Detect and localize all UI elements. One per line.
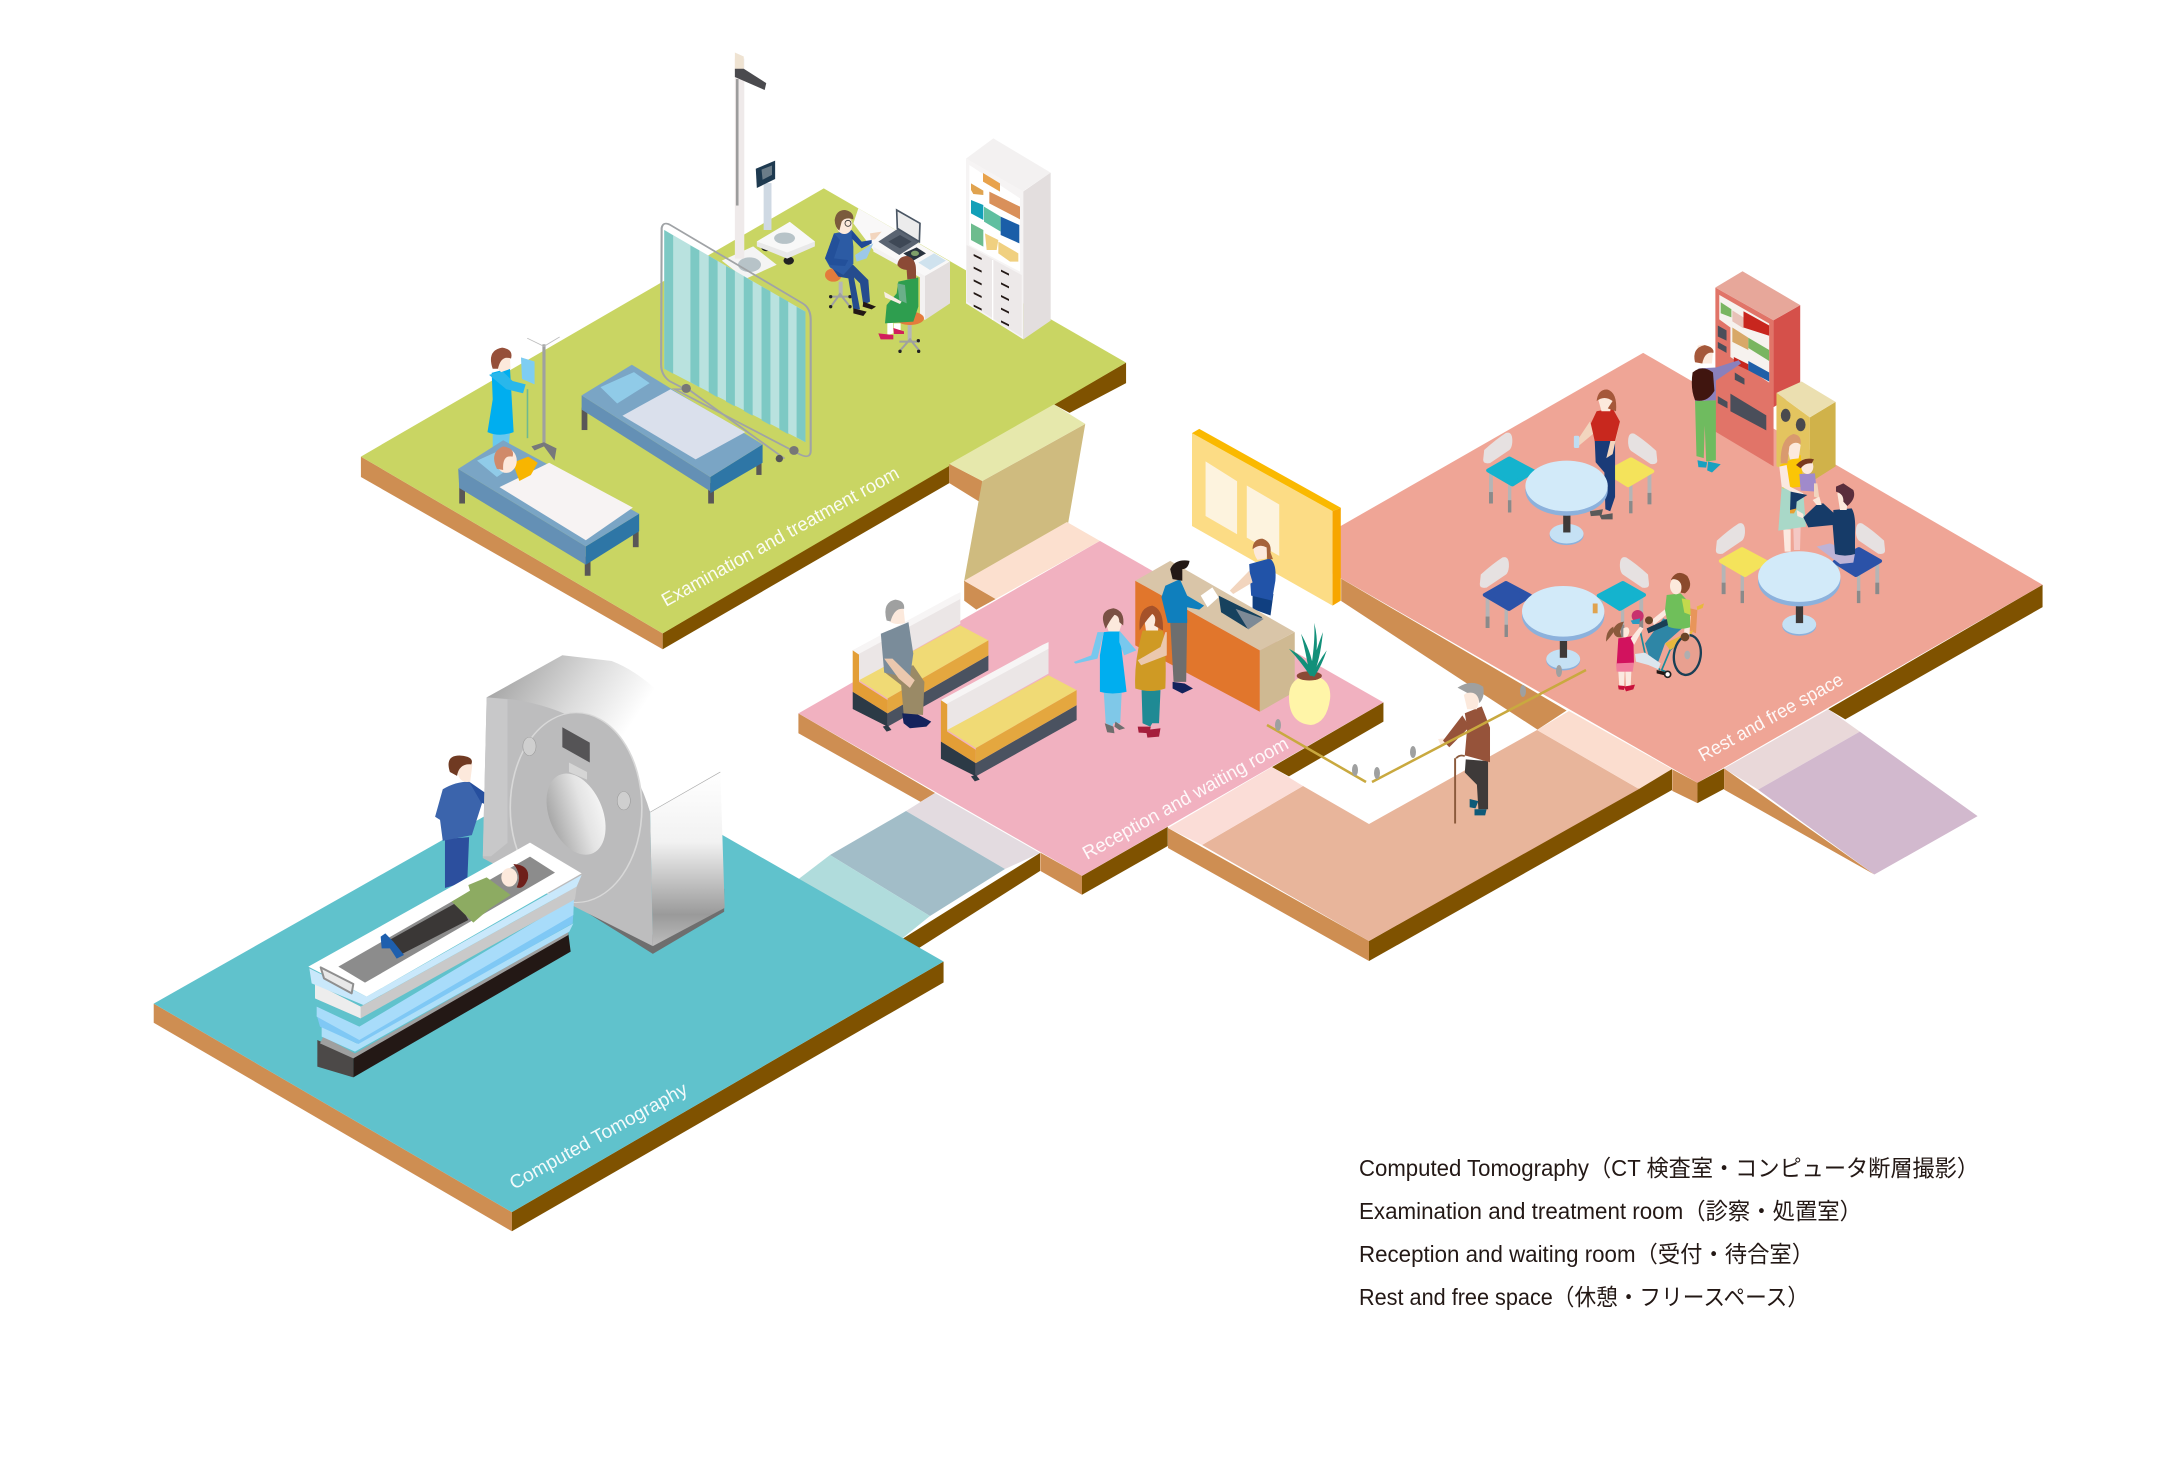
IV stand [521,337,560,461]
front-left table [1522,586,1604,670]
reception sign wall [1192,429,1341,606]
floor: examination and treatment room [361,188,1126,649]
legend [1359,1155,1979,1310]
rear table [1525,461,1608,545]
legend line 3: Reception and waiting room（受付・待合室） [1359,1241,1814,1267]
chairs at rear table [1483,433,1657,513]
treatment area: beds, curtain, IV and nurse [458,224,811,576]
side faces of rest floor [1341,579,2043,803]
rest area: machines, rear tables and chairs [1480,271,1885,670]
chairs at right table [1716,523,1885,603]
floor: link corridor tiles to computed tomography [796,793,1040,948]
top surface of reception floor [798,541,1383,876]
floor: entrance corridor [1168,711,1672,961]
legend line 4: Rest and free space（休憩・フリースペース） [1359,1284,1809,1310]
treatment bed with patient [458,440,639,576]
bookshelf [966,138,1051,339]
vending machine yellow [1776,381,1836,483]
right table [1758,551,1840,636]
man at counter [1161,560,1204,693]
label: Examination and treatment room: Examination and treatment room [658,463,903,611]
waiting bench rear [853,592,988,732]
CT gantry [483,655,725,954]
seated patient woman [878,256,924,353]
doctor [825,210,882,316]
waiting bench front [941,642,1077,781]
label: Computed Tomography: Computed Tomography [506,1079,692,1194]
father seated [1797,483,1855,564]
reception furniture and people [853,429,1341,781]
floor: reception and waiting room [798,522,1383,895]
legend line 1: Computed Tomography（CT 検査室・コンピュータ断層撮影） [1359,1155,1979,1181]
nurse in blue [1074,608,1136,733]
patient on CT table [381,864,528,959]
elderly man with cane [1438,683,1490,824]
CT room operator and gantry [435,655,725,954]
height measure [722,52,777,279]
weight scale [756,161,815,265]
nurse [487,348,526,450]
CT operator [435,756,503,888]
label: Reception and waiting room: Reception and waiting room [1079,734,1292,864]
legend line 2: Examination and treatment room（診察・処置室） [1359,1198,1862,1224]
chairs at front-left table [1480,557,1649,637]
peach doorway tile [964,522,1100,599]
side faces of examination floor [361,363,1126,649]
pregnant woman [1135,606,1167,738]
laptop [878,210,920,255]
top surface of examination floor [361,188,1126,633]
examination room equipment and people [722,52,815,279]
person at vending machine [1692,345,1741,472]
reception counter [1135,561,1295,712]
side faces of reception floor [798,581,1383,895]
family group: mother, child, father [1778,434,1855,564]
handrail along corridor [1267,665,1586,782]
top surface of rest floor [1295,353,2043,783]
seated elderly man [881,600,931,728]
bed by the curtain [582,365,763,504]
potted plant [1289,623,1330,725]
mother holding child [1778,434,1819,552]
woman in red [1574,390,1620,519]
receptionist [1230,539,1276,616]
wheelchair user and girl with flowers [1606,573,1704,691]
connector stair [949,404,1085,582]
vending machine red [1715,271,1800,466]
ramp [1724,709,1978,875]
white desk [853,208,950,320]
consultation corner: desk, laptop, doctor, patient, bookshelf [825,138,1051,353]
CT patient table [308,843,582,1077]
label: Rest and free space: Rest and free space [1695,669,1847,766]
floor: rest and free space [1295,353,2043,875]
floor: computed tomography room [154,758,944,1231]
wheelchair user [1635,573,1704,677]
folding curtain screen [661,224,811,462]
little girl with flowers [1606,610,1644,691]
